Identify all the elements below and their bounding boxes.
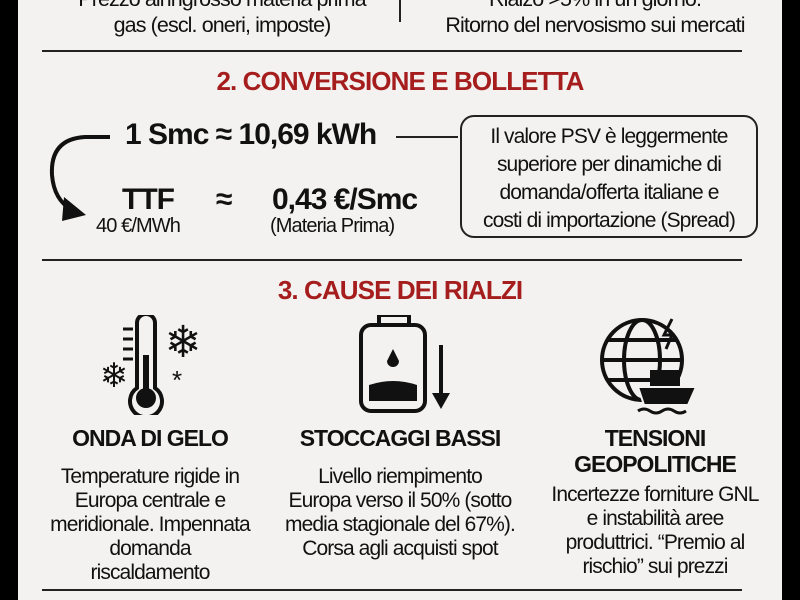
- text: ≈: [216, 183, 231, 216]
- column 1: onda di gelo: [50, 425, 251, 584]
- text: STOCCAGGI BASSI: [300, 425, 500, 451]
- icon: thermometer: [100, 315, 201, 415]
- text: Europa verso il 50% (sotto: [289, 489, 511, 512]
- text: riscaldamento: [90, 561, 210, 584]
- heading 2: 2. CONVERSIONE E BOLLETTA: [216, 66, 584, 96]
- icon: globe ship: [600, 318, 694, 414]
- top text right: [445, 0, 745, 37]
- text: Corsa agli acquisti spot: [302, 537, 498, 560]
- text: Il valore PSV è leggermente: [490, 125, 728, 148]
- top text left: gas (escl. oneri, imposte): [114, 13, 330, 37]
- column 3: tensioni geopolitiche: [551, 425, 759, 578]
- text: (Materia Prima): [270, 215, 394, 237]
- top text right: Ritorno del nervosismo sui mercati: [445, 13, 745, 37]
- text: domanda/offerta italiane e: [499, 181, 719, 204]
- text: Europa centrale e: [75, 489, 225, 512]
- text: e instabilità aree: [587, 507, 723, 530]
- text: ONDA DI GELO: [72, 425, 228, 451]
- text: Livello riempimento: [318, 465, 482, 488]
- conversion formula: 1 Smc ≈ 10,69 kWh: [125, 118, 376, 151]
- PSV callout box: [460, 115, 758, 238]
- icon: storage battery: [359, 315, 450, 413]
- icon: thermometer: ❄: [165, 318, 201, 367]
- text: Incertezze forniture GNL: [551, 483, 759, 506]
- arrow curve: [50, 135, 110, 221]
- text: superiore per dinamiche di: [497, 153, 721, 176]
- TTF row: TTF: [122, 183, 174, 216]
- icon: thermometer: ❄: [100, 357, 128, 395]
- text: media stagionale del 67%).: [285, 513, 515, 536]
- text: GEOPOLITICHE: [574, 451, 736, 477]
- icon: thermometer: *: [172, 365, 182, 395]
- text: costi di importazione (Spread): [483, 209, 735, 232]
- text: rischio” sui prezzi: [582, 555, 728, 578]
- text: 40 €/MWh: [96, 215, 180, 237]
- text: Temperature rigide in: [61, 465, 239, 488]
- text: TENSIONI: [605, 425, 705, 451]
- column 2: stoccaggi bassi: [285, 425, 515, 560]
- text: domanda: [109, 537, 191, 560]
- text: meridionale. Impennata: [50, 513, 250, 536]
- text: produttrici. “Premio al: [566, 531, 744, 554]
- text: 0,43 €/Smc: [272, 183, 417, 216]
- heading 3: 3. CAUSE DEI RIALZI: [278, 275, 522, 305]
- top text left: [78, 0, 367, 37]
